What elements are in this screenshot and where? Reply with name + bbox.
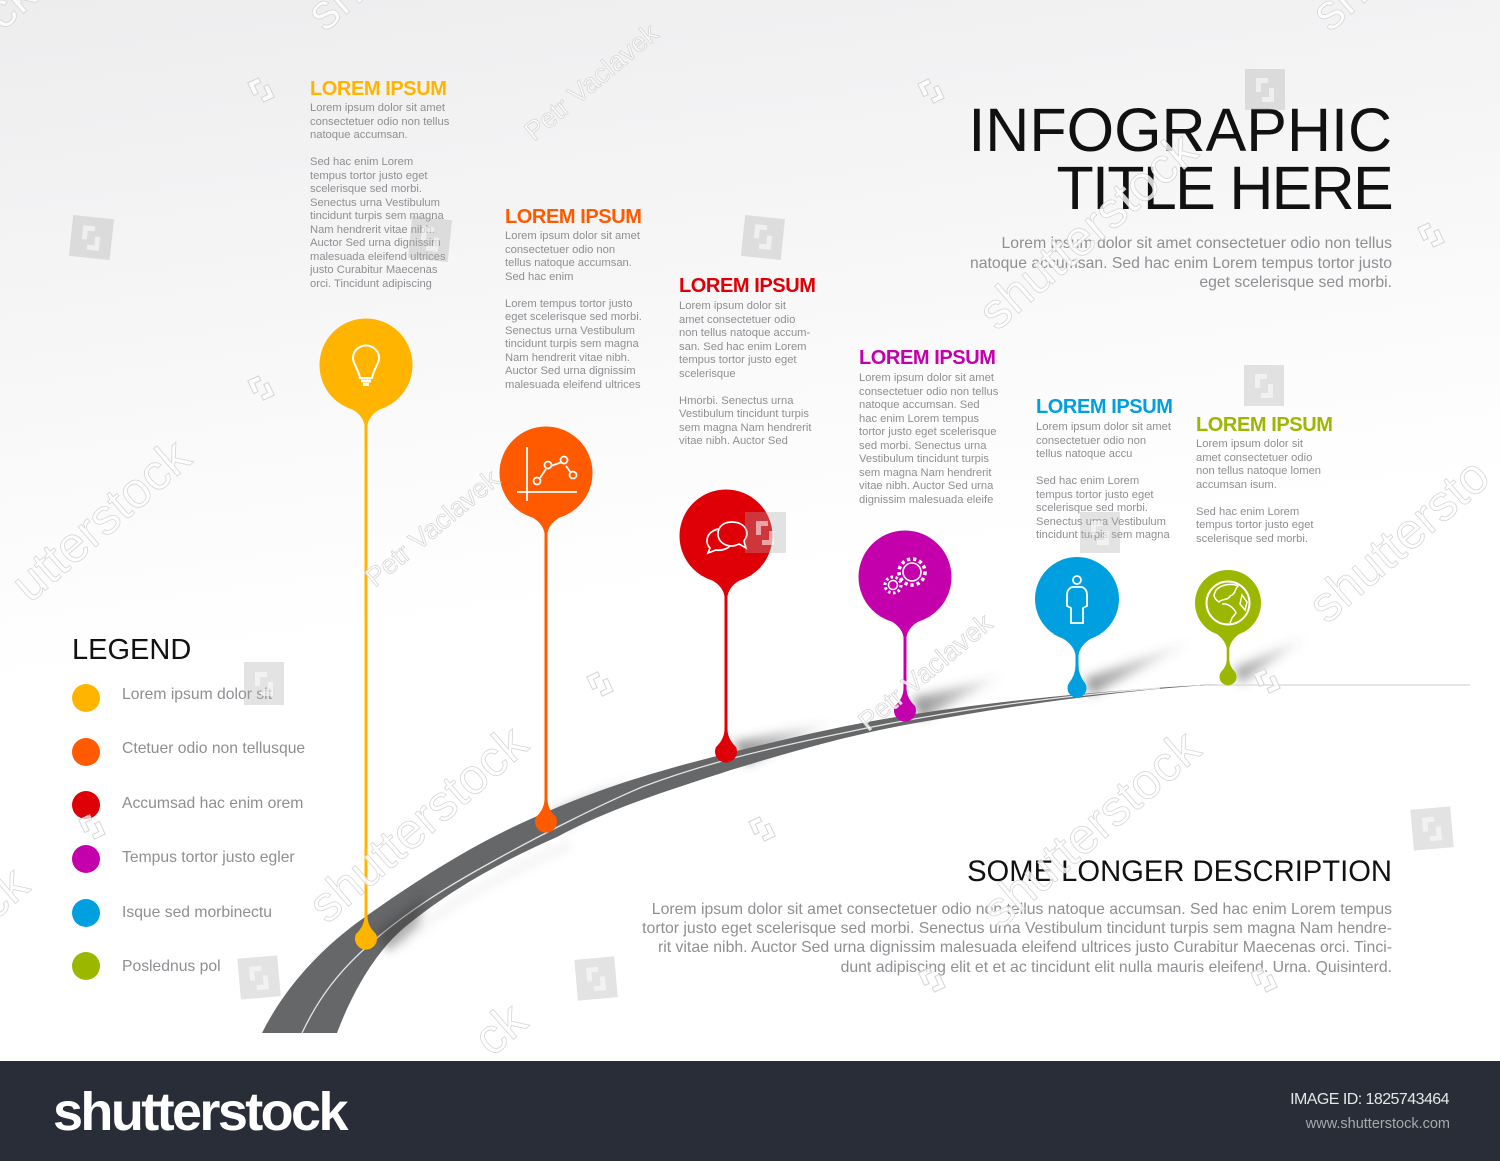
- road surface: [262, 684, 1220, 1033]
- step 5 text: Senectus urna Vestibulum: [1036, 516, 1166, 528]
- step 1 text: orci. Tincidunt adipiscing: [310, 278, 432, 290]
- step 4 heading: LOREM IPSUM: [859, 347, 996, 369]
- step 3 heading: LOREM IPSUM: [679, 275, 816, 297]
- step 5 text: Sed hac enim Lorem: [1036, 475, 1139, 487]
- step 2 text: Sed hac enim: [505, 270, 573, 282]
- description text: tortor justo eget scelerisque sed morbi. Senectus urna Vestibulum tincidunt turpis sem magna Nam hendre-: [642, 920, 1392, 937]
- footer bar: [0, 1061, 1500, 1161]
- step 5 text: scelerisque sed morbi.: [1036, 502, 1148, 514]
- step 2 text: tellus natoque accumsan.: [505, 257, 632, 269]
- step 1 text: tincidunt turpis sem magna: [310, 210, 444, 222]
- step 1 text: [310, 102, 449, 290]
- legend item 3: [72, 791, 303, 819]
- step 1 text: Auctor Sed urna dignissim: [310, 237, 441, 249]
- step 3 text: Lorem ipsum dolor sit: [679, 300, 786, 312]
- step 1 text: Senectus urna Vestibulum: [310, 196, 440, 208]
- step 6 text: Lorem ipsum dolor sit: [1196, 438, 1303, 450]
- image id: IMAGE ID: 1825743464: [1290, 1091, 1449, 1108]
- step 4 text: sem magna Nam hendrerit: [859, 466, 991, 478]
- pin 4: magenta gears: [858, 530, 952, 722]
- step 1 text: natoque accumsan.: [310, 129, 408, 141]
- step 3 text: Vestibulum tincidunt turpis: [679, 408, 809, 420]
- step 6 text: non tellus natoque lomen: [1196, 465, 1321, 477]
- step 1 text: Nam hendrerit vitae nibh.: [310, 224, 435, 236]
- step 6 text: Sed hac enim Lorem: [1196, 506, 1299, 518]
- step 2 text: eget scelerisque sed morbi.: [505, 311, 642, 323]
- legend item 4: [72, 845, 295, 873]
- watermark overlay: shutterstock: [970, 719, 1211, 938]
- intro text: natoque accumsan. Sed hac enim Lorem tempus tortor justo: [970, 254, 1392, 272]
- step 1 text: justo Curabitur Maecenas: [310, 264, 437, 276]
- pin 5: blue person: [1035, 557, 1119, 698]
- step 6 text: accumsan isum.: [1196, 478, 1277, 490]
- step 3 text: san. Sed hac enim Lorem: [679, 340, 806, 352]
- main title: TITLE HERE: [1056, 154, 1392, 222]
- step 1 text: malesuada eleifend ultrices: [310, 250, 446, 262]
- intro text: Lorem ipsum dolor sit amet consectetuer odio non tellus: [1002, 235, 1392, 252]
- legend heading: LEGEND: [72, 634, 191, 666]
- step 4 text: [859, 372, 998, 506]
- step 2 text: Nam hendrerit vitae nibh.: [505, 352, 630, 364]
- soft road edge shadow: [400, 845, 570, 945]
- legend item 4: Tempus tortor justo egler: [122, 849, 295, 866]
- step 3 text: [679, 300, 812, 447]
- step 2 text: [505, 230, 642, 390]
- step 4 text: dignissim malesuada eleife: [859, 494, 993, 506]
- road shadows: [553, 635, 1310, 828]
- description text: rit vitae nibh. Auctor Sed urna dignissim malesuada eleifend ultrices justo Curabitur Maecenas orci. Tinci-: [658, 939, 1392, 956]
- step 4 text: sed morbi. Senectus urna: [859, 440, 986, 452]
- icon: speech bubbles: [707, 522, 747, 553]
- step 1 text: consectetuer odio non tellus: [310, 116, 449, 128]
- step 2 text: consectetuer odio non: [505, 244, 615, 256]
- watermark overlay: Petr Vaclavek: [853, 608, 998, 737]
- step 6 text: tempus tortor justo eget: [1196, 519, 1314, 531]
- pin 6: green globe: [1195, 570, 1261, 685]
- step 4 text: consectetuer odio non tellus: [859, 386, 998, 398]
- description heading: SOME LONGER DESCRIPTION: [967, 856, 1392, 888]
- pin 1: yellow lightbulb: [320, 318, 412, 950]
- step 3 text: vitae nibh. Auctor Sed: [679, 435, 788, 447]
- thin horizon line: [1200, 684, 1470, 686]
- step 2 text: Lorem ipsum dolor sit amet: [505, 230, 640, 242]
- step 2 heading: LOREM IPSUM: [505, 206, 642, 228]
- legend item 3: Accumsad hac enim orem: [122, 795, 303, 812]
- legend item 6: [72, 952, 221, 980]
- step 2 text: tincidunt turpis sem magna: [505, 338, 639, 350]
- step 3 text: amet consectetuer odio: [679, 314, 795, 326]
- step 5 heading: LOREM IPSUM: [1036, 396, 1172, 418]
- step 6 heading: LOREM IPSUM: [1196, 414, 1332, 436]
- legend item 1: [72, 684, 272, 712]
- step 4 text: hac enim Lorem tempus: [859, 412, 979, 424]
- icon: globe: [1206, 582, 1250, 624]
- step 5 text: tellus natoque accu: [1036, 448, 1132, 460]
- shade on road beside yellow pin: [376, 895, 425, 952]
- step 4 text: vitae nibh. Auctor Sed urna: [859, 480, 993, 492]
- step 6 text: [1196, 438, 1321, 544]
- watermark overlay: shutterstock: [297, 714, 538, 933]
- step 3 text: scelerisque: [679, 368, 736, 380]
- description text: Lorem ipsum dolor sit amet consectetuer odio non tellus natoque accumsan. Sed hac enim Lorem tempus: [652, 901, 1392, 918]
- intro text: [970, 235, 1392, 291]
- icon: line chart: [517, 447, 577, 501]
- main title: [968, 96, 1392, 222]
- centre line: [302, 688, 1160, 1033]
- legend item 6: Poslednus pol: [122, 958, 221, 975]
- step 4 text: tortor justo eget scelerisque: [859, 426, 996, 438]
- step 2 text: Auctor Sed urna dignissim: [505, 365, 636, 377]
- step 1 text: scelerisque sed morbi.: [310, 183, 422, 195]
- watermark overlay: utterstock: [0, 427, 202, 612]
- step 1 text: Lorem ipsum dolor sit amet: [310, 102, 445, 114]
- footer logo: shutterstock: [53, 1082, 346, 1142]
- road: [262, 684, 1470, 1033]
- site url: www.shutterstock.com: [1306, 1116, 1450, 1132]
- step 3 text: tempus tortor justo eget: [679, 354, 797, 366]
- legend item 2: [72, 738, 305, 766]
- step 5 text: consectetuer odio non: [1036, 434, 1146, 446]
- watermark overlay: Petr Vaclavek: [519, 18, 664, 147]
- icon: lightbulb: [353, 346, 379, 384]
- step 6 text: scelerisque sed morbi.: [1196, 532, 1308, 544]
- step 4 text: natoque accumsan. Sed: [859, 399, 980, 411]
- step 3 text: non tellus natoque accum-: [679, 327, 810, 339]
- icon: gears: [885, 559, 925, 593]
- legend item 5: [72, 899, 272, 927]
- step 2 text: Senectus urna Vestibulum: [505, 324, 635, 336]
- watermark overlay: shuttersto: [1297, 447, 1500, 633]
- step 1 text: tempus tortor justo eget: [310, 170, 428, 182]
- description text: dunt adipiscing elit et et ac tincidunt elit nulla mauris eleifend. Urna. Quisinterd.: [841, 959, 1392, 976]
- icon: person: [1067, 576, 1087, 623]
- watermark overlay: shutterstock: [967, 121, 1208, 340]
- description text: [642, 901, 1392, 976]
- step 2 text: Lorem tempus tortor justo: [505, 298, 632, 310]
- legend item 5: Isque sed morbinectu: [122, 904, 272, 921]
- step 5 text: Lorem ipsum dolor sit amet: [1036, 421, 1171, 433]
- intro text: eget scelerisque sed morbi.: [1199, 274, 1392, 291]
- step 4 text: Vestibulum tincidunt turpis: [859, 453, 989, 465]
- step 1 heading: LOREM IPSUM: [310, 78, 446, 100]
- legend item 1: Lorem ipsum dolor sit: [122, 686, 272, 703]
- step 4 text: Lorem ipsum dolor sit amet: [859, 372, 994, 384]
- step 2 text: malesuada eleifend ultrices: [505, 378, 641, 390]
- legend item 2: Ctetuer odio non tellusque: [122, 740, 305, 757]
- watermark overlay: Petr Vaclavek: [360, 464, 505, 593]
- pin 3: red speech: [680, 490, 772, 763]
- step 3 text: sem magna Nam hendrerit: [679, 422, 811, 434]
- step 6 text: amet consectetuer odio: [1196, 452, 1312, 464]
- pin 2: orange chart: [500, 426, 592, 833]
- step 5 text: tempus tortor justo eget: [1036, 488, 1154, 500]
- step 5 text: [1036, 421, 1171, 541]
- step 3 text: Hmorbi. Senectus urna: [679, 394, 793, 406]
- step 1 text: Sed hac enim Lorem: [310, 156, 413, 168]
- main title: INFOGRAPHIC: [968, 96, 1392, 164]
- step 5 text: tincidunt turpis sem magna: [1036, 529, 1170, 541]
